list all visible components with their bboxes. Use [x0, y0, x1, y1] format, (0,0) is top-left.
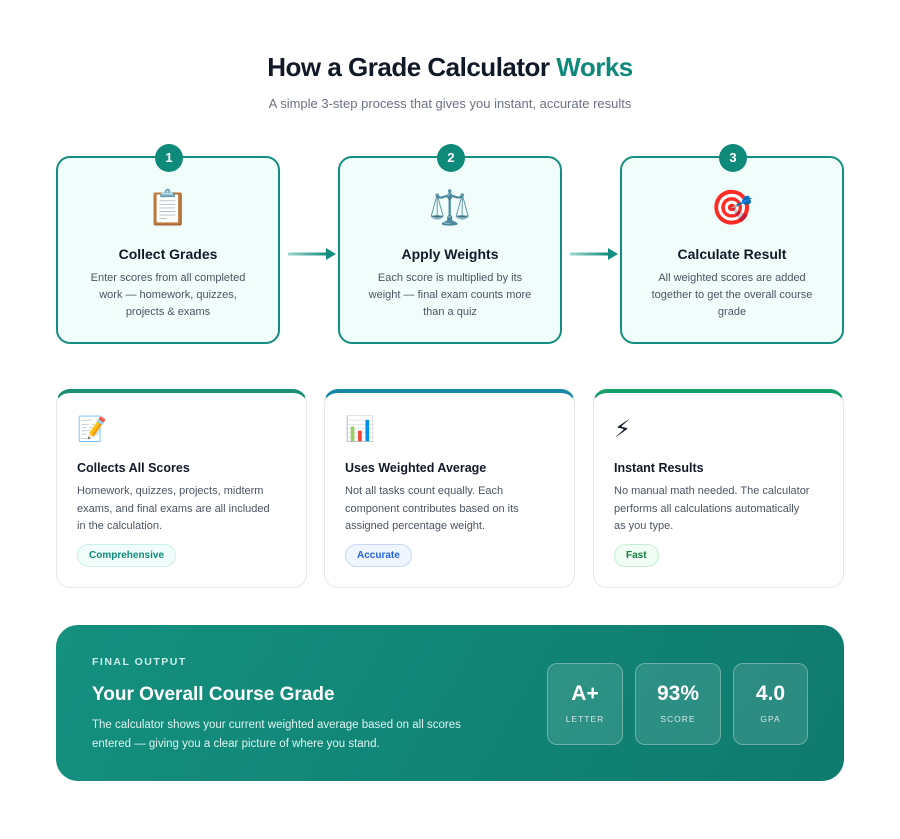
feature: instant — [593, 389, 844, 588]
step 1: Enter scores from all completed work — homework, quizzes, projects & exams — [91, 272, 245, 318]
step 1: 1 — [165, 150, 173, 165]
subtitle: A simple 3-step process that gives you instant, accurate results — [269, 96, 631, 111]
step 2: Each score is multiplied by its weight — final exam counts more than a quiz — [369, 272, 531, 318]
stat: letter: LETTER — [566, 714, 604, 724]
stat: letter — [547, 663, 623, 745]
final output banner: FINAL OUTPUT — [92, 656, 187, 668]
feature: instant: ⚡ — [614, 416, 631, 443]
stat: gpa — [733, 663, 808, 745]
stat: score: 93% — [657, 682, 699, 705]
feature: weighted: Not all tasks count equally. Each component contributes based on its assigned percentage weight. — [345, 485, 519, 532]
stat: letter: A+ — [571, 682, 599, 705]
feature: collects: Homework, quizzes, projects, midterm exams, and final exams are all included in the calculation. — [77, 485, 270, 532]
title: How a Grade Calculator Works — [267, 52, 633, 82]
arrow 1 — [288, 248, 336, 260]
stat: score: SCORE — [660, 714, 696, 724]
final output banner: Your Overall Course Grade — [92, 684, 335, 705]
feature: collects: Collects All Scores — [77, 461, 190, 475]
stat: gpa: GPA — [760, 714, 781, 724]
stat: score — [635, 663, 721, 745]
step 3 — [620, 156, 844, 344]
step 3: Calculate Result — [678, 246, 786, 262]
step 2 — [338, 156, 562, 344]
feature: collects — [56, 389, 307, 588]
feature: instant: Fast — [626, 550, 647, 560]
step 3: All weighted scores are added together to get the overall course grade — [652, 272, 812, 318]
feature: weighted: Uses Weighted Average — [345, 461, 486, 475]
step 2: Apply Weights — [402, 246, 498, 262]
step 1 — [56, 156, 280, 344]
step 3: 3 — [729, 150, 737, 165]
step 2: 2 — [447, 150, 455, 165]
step 3: 🎯 — [711, 189, 753, 227]
feature: weighted: Accurate — [357, 550, 400, 560]
feature: instant: Instant Results — [614, 461, 704, 475]
feature: weighted — [324, 389, 575, 588]
feature: collects: 📝 — [77, 416, 107, 443]
stat: gpa: 4.0 — [756, 682, 785, 705]
final output banner — [56, 625, 844, 781]
feature: weighted: 📊 — [345, 416, 375, 443]
step 1: Collect Grades — [119, 246, 217, 262]
step 1: 📋 — [147, 189, 189, 227]
feature: collects: Comprehensive — [89, 550, 164, 560]
arrow 2 — [570, 248, 618, 260]
step 2: ⚖️ — [429, 189, 471, 227]
final output banner: The calculator shows your current weighted average based on all scores entered — giving you a clear picture of where you stand. — [92, 719, 461, 750]
feature: instant: No manual math needed. The calculator performs all calculations automatically as you type. — [614, 485, 809, 532]
